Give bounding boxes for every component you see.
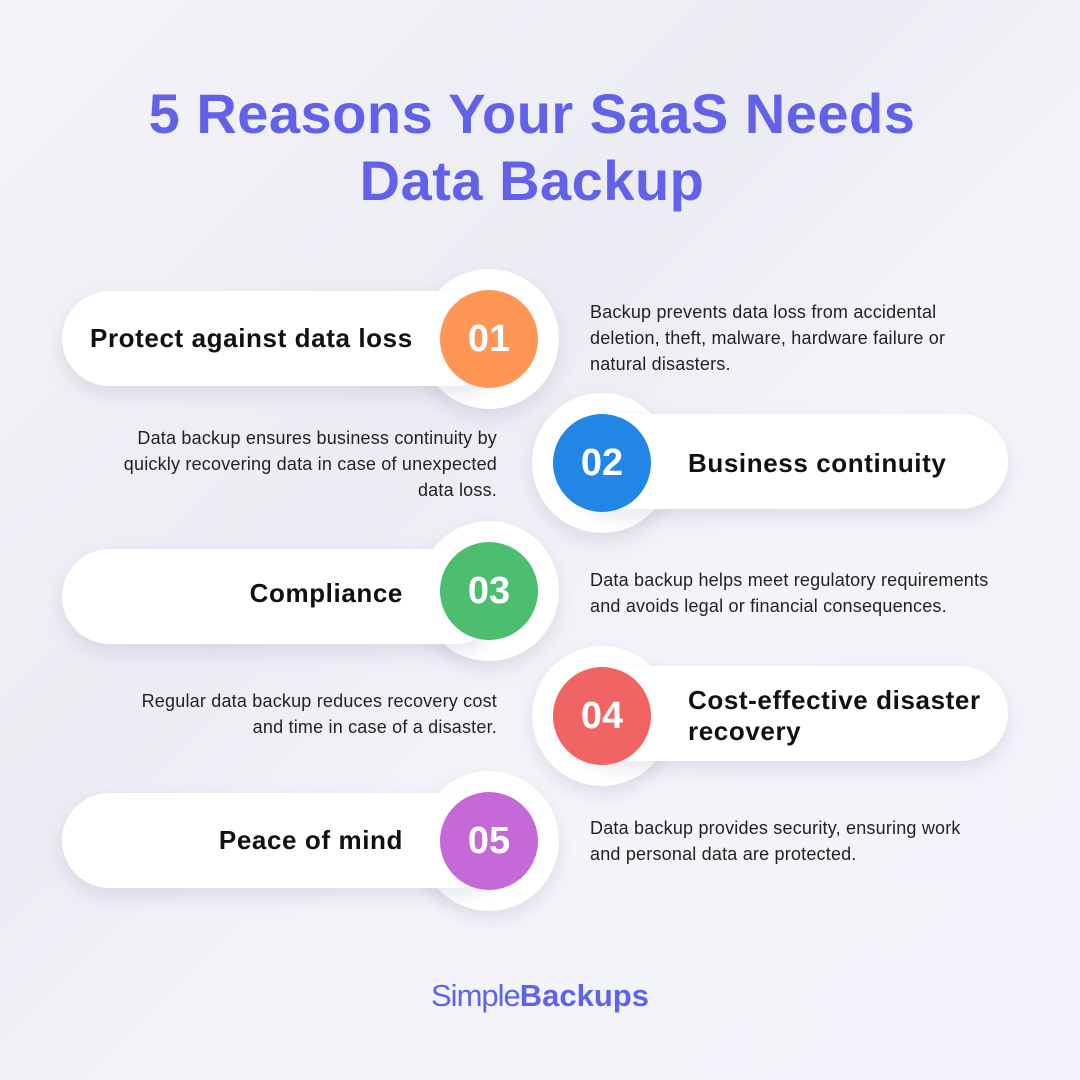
number 01 bbox=[440, 290, 538, 388]
halo shapes bbox=[430, 269, 663, 922]
logo: SimpleBackups bbox=[431, 978, 649, 1013]
pill 5 bbox=[62, 793, 502, 888]
desc 3: and avoids legal or financial consequences. bbox=[590, 596, 947, 616]
number 03: 03 bbox=[468, 570, 510, 612]
pill 2 bbox=[570, 414, 1008, 509]
desc 1: Backup prevents data loss from accidental bbox=[590, 302, 936, 322]
label 5: Peace of mind bbox=[219, 825, 403, 855]
desc 3: Data backup helps meet regulatory requirements bbox=[590, 570, 988, 590]
label 4: Cost-effective disaster bbox=[688, 685, 981, 715]
desc 5 bbox=[590, 818, 961, 864]
desc 2: data loss. bbox=[418, 480, 497, 500]
desc 4: Regular data backup reduces recovery cost bbox=[142, 691, 497, 711]
desc 1: natural disasters. bbox=[590, 354, 731, 374]
label 4 bbox=[688, 685, 981, 746]
title bbox=[149, 82, 915, 212]
desc 2: quickly recovering data in case of unexpected bbox=[124, 454, 497, 474]
number 03 bbox=[440, 542, 538, 640]
label 2: Business continuity bbox=[688, 448, 946, 478]
pill 3 bbox=[62, 549, 502, 644]
label 3: Compliance bbox=[250, 578, 403, 608]
desc 2: Data backup ensures business continuity by bbox=[137, 428, 497, 448]
desc 1 bbox=[590, 302, 945, 374]
number 05 bbox=[440, 792, 538, 890]
number 04: 04 bbox=[581, 695, 623, 737]
number 01: 01 bbox=[468, 318, 510, 360]
desc 4 bbox=[142, 691, 497, 737]
number 04 bbox=[553, 667, 651, 765]
pill 1 bbox=[62, 291, 502, 386]
desc 3 bbox=[590, 570, 988, 616]
desc 1: deletion, theft, malware, hardware failure or bbox=[590, 328, 945, 348]
desc 2 bbox=[124, 428, 497, 500]
number 02: 02 bbox=[581, 442, 623, 484]
number 02 bbox=[553, 414, 651, 512]
title: Data Backup bbox=[360, 149, 704, 212]
label 1: Protect against data loss bbox=[90, 323, 413, 353]
title: 5 Reasons Your SaaS Needs bbox=[149, 82, 915, 145]
desc 5: and personal data are protected. bbox=[590, 844, 857, 864]
desc 4: and time in case of a disaster. bbox=[253, 717, 497, 737]
pill 4 bbox=[570, 666, 1008, 761]
number 05: 05 bbox=[468, 820, 510, 862]
desc 5: Data backup provides security, ensuring work bbox=[590, 818, 961, 838]
label 4: recovery bbox=[688, 716, 801, 746]
